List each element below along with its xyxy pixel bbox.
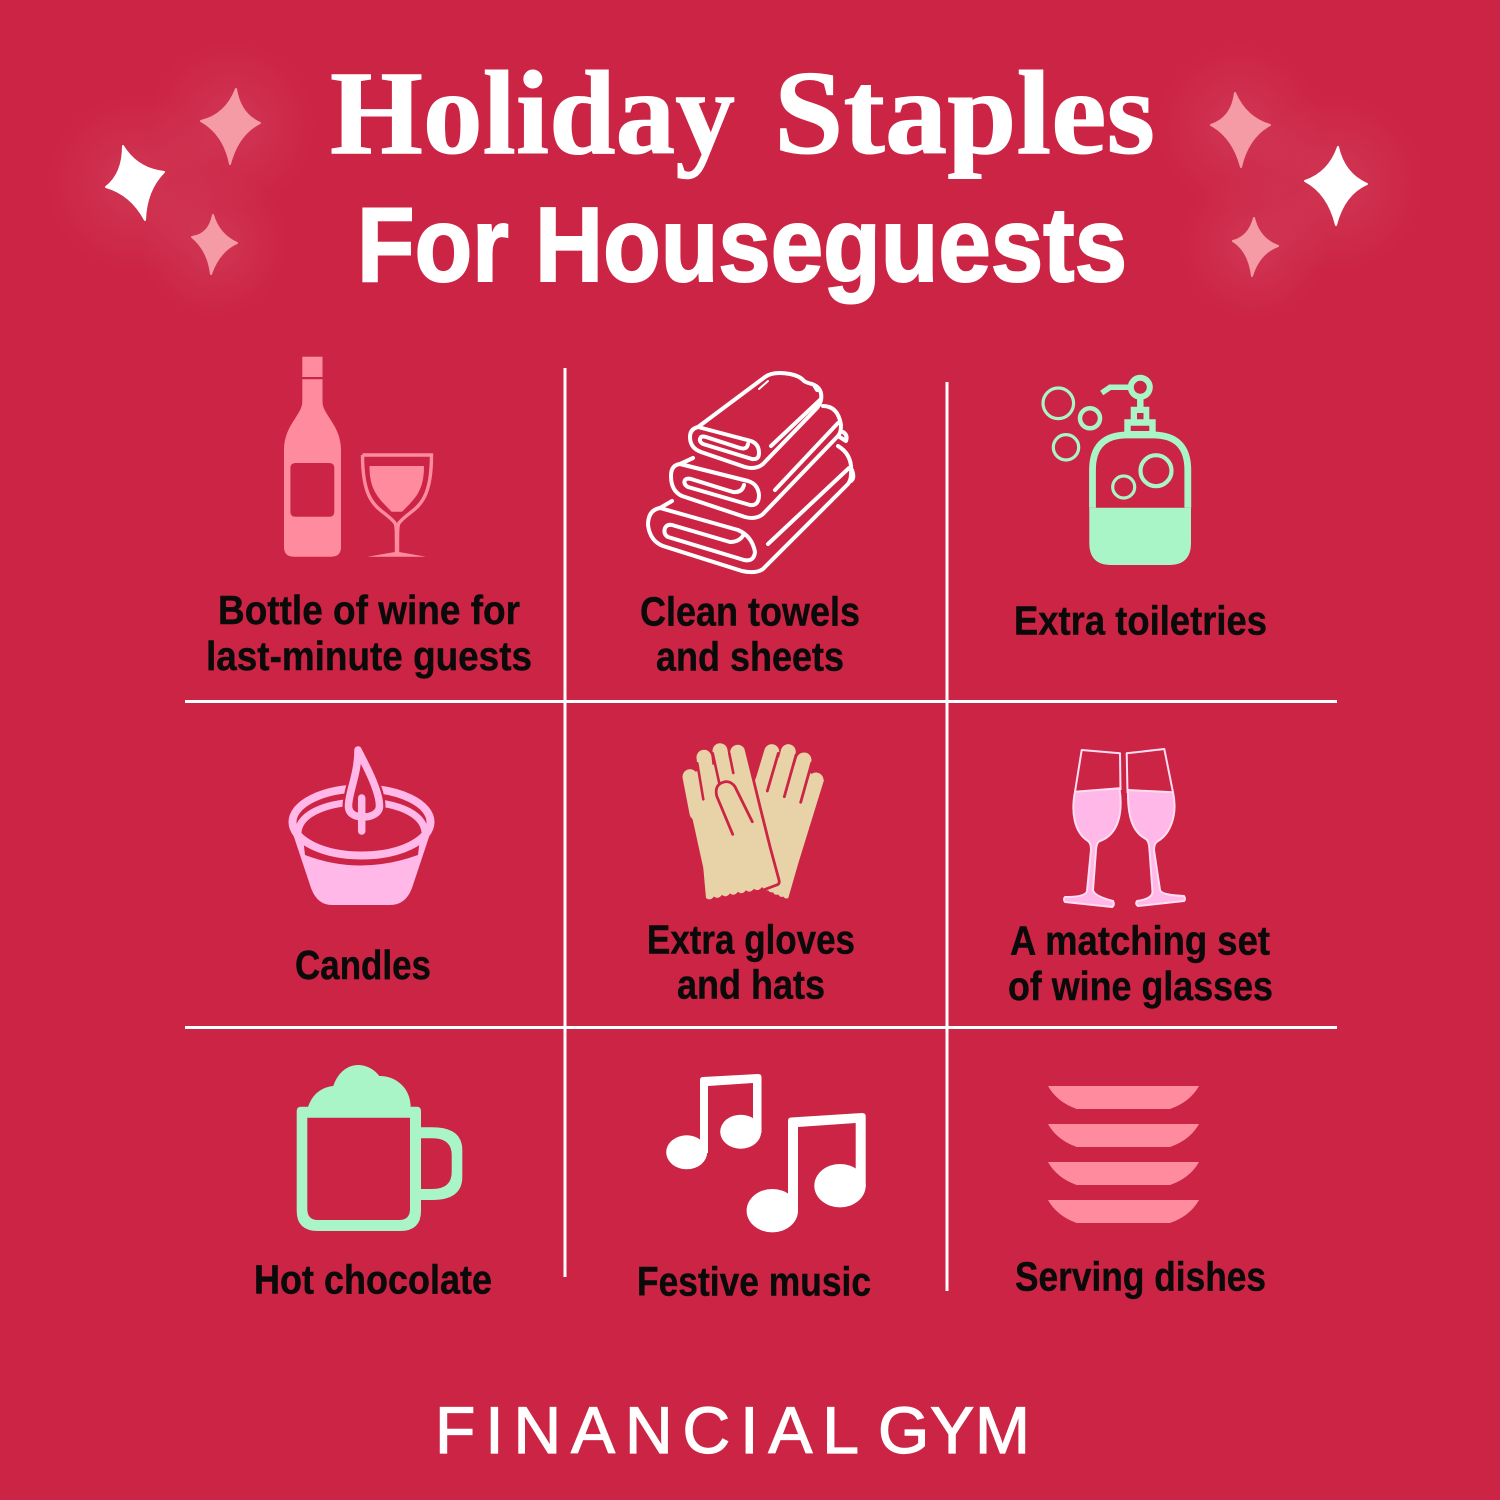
icon: mug with foam xyxy=(297,1065,462,1231)
icon: candle xyxy=(290,750,433,905)
label: Serving dishes xyxy=(1015,1254,1266,1300)
icon: gloves xyxy=(683,745,824,899)
panel: wine bottle xyxy=(206,357,532,679)
icon: music notes xyxy=(666,1074,866,1232)
title: Staples xyxy=(774,46,1155,179)
label xyxy=(1008,918,1273,1009)
icon: stacked towels xyxy=(648,373,853,572)
label xyxy=(647,916,855,1008)
label: Extra toiletries xyxy=(1014,598,1267,644)
label xyxy=(640,588,860,680)
label: Festive music xyxy=(637,1258,871,1304)
title xyxy=(330,46,1155,304)
icon: stacked dishes xyxy=(1048,1086,1199,1223)
label: Bottle of wine for xyxy=(218,587,520,633)
grid lines xyxy=(185,368,1337,1291)
sparkles: right group xyxy=(1155,42,1426,320)
panel: festive music xyxy=(637,1074,871,1304)
icon: bottle and wine glass xyxy=(284,357,432,557)
label xyxy=(206,587,532,679)
sparkles: left group xyxy=(45,40,317,318)
label: last-minute guests xyxy=(206,633,532,679)
label: Hot chocolate xyxy=(254,1256,492,1302)
label: A matching set xyxy=(1010,918,1270,964)
panel: gloves xyxy=(647,745,855,1008)
label: and sheets xyxy=(656,634,844,680)
panel: wine glasses xyxy=(1008,749,1273,1009)
label: Clean towels xyxy=(640,588,860,634)
label: Candles xyxy=(295,942,431,988)
panel: candles xyxy=(290,750,433,988)
label: of wine glasses xyxy=(1008,963,1273,1009)
icon: clinking wine glasses xyxy=(1064,749,1185,907)
label: and hats xyxy=(677,962,825,1008)
panel: serving dishes xyxy=(1015,1086,1266,1300)
title: For Houseguests xyxy=(357,186,1127,304)
footer logo: GYM xyxy=(878,1393,1030,1467)
panel: hot chocolate xyxy=(254,1065,492,1302)
footer logo: FINANCIAL xyxy=(435,1393,859,1467)
title: Holiday xyxy=(330,46,735,179)
label: Extra gloves xyxy=(647,916,855,962)
panel: toiletries xyxy=(1014,378,1267,644)
panel: towels xyxy=(640,373,860,680)
icon: soap dispenser xyxy=(1043,378,1191,565)
